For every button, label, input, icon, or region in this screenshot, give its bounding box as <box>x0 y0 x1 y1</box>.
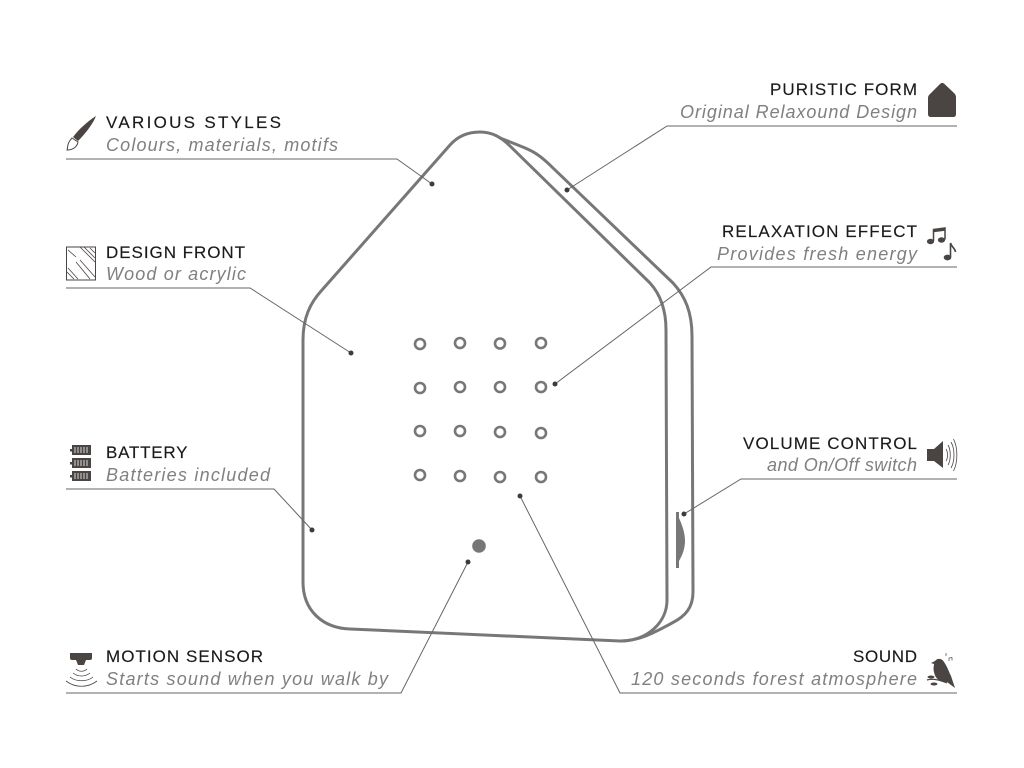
icon: music notes <box>927 228 956 260</box>
product illustration: speaker house <box>303 132 693 641</box>
callout: motion sensor <box>66 560 470 693</box>
subtitle: Colours, materials, motifs <box>106 135 338 155</box>
callout: puristic form <box>564 80 957 192</box>
leader dot <box>518 494 522 498</box>
leader line <box>66 562 468 693</box>
icon: bird with notes <box>927 653 955 688</box>
icon: house <box>928 83 956 117</box>
leader line <box>66 489 312 530</box>
leader line <box>567 126 957 190</box>
icon: motion sensor <box>66 653 97 686</box>
icon: paint brush <box>67 116 96 150</box>
leader line <box>66 159 432 184</box>
motion sensor dot <box>472 539 486 553</box>
icon: speaker <box>927 439 957 471</box>
heading: MOTION SENSOR <box>106 647 263 666</box>
leader line <box>520 496 957 693</box>
leader dot <box>310 528 314 532</box>
heading: BATTERY <box>106 443 188 462</box>
leader dot <box>430 182 434 186</box>
front outline of housing <box>303 132 667 641</box>
leader line <box>555 267 957 384</box>
leader dot <box>552 382 558 386</box>
heading: DESIGN FRONT <box>106 243 245 262</box>
callout: battery <box>66 443 314 532</box>
heading: VOLUME CONTROL <box>743 434 917 453</box>
subtitle: Original Relaxound Design <box>680 102 917 122</box>
icon: hatched square <box>66 247 96 280</box>
subtitle: Provides fresh energy <box>717 244 918 264</box>
heading: PURISTIC FORM <box>770 80 917 99</box>
heading: SOUND <box>853 647 917 666</box>
callout: sound <box>518 494 957 693</box>
subtitle: and On/Off switch <box>767 455 917 475</box>
leader line <box>684 479 957 514</box>
leader line <box>66 288 351 353</box>
icon: batteries <box>70 445 91 481</box>
callout: volume control <box>682 434 957 516</box>
callout: design front <box>66 243 354 356</box>
volume slider <box>676 512 685 568</box>
heading: RELAXATION EFFECT <box>722 222 917 241</box>
subtitle: Batteries included <box>106 465 271 485</box>
heading: VARIOUS STYLES <box>106 113 281 132</box>
leader dot <box>682 512 686 516</box>
speaker holes grid <box>415 338 546 482</box>
subtitle: Starts sound when you walk by <box>106 669 389 689</box>
callout: relaxation effect <box>552 222 957 386</box>
callout: various styles <box>66 113 434 186</box>
leader dot <box>564 188 570 192</box>
leader dot <box>466 560 470 564</box>
leader dot <box>348 350 354 356</box>
subtitle: 120 seconds forest atmosphere <box>631 669 917 689</box>
subtitle: Wood or acrylic <box>106 264 246 284</box>
back edge of housing <box>500 138 693 641</box>
